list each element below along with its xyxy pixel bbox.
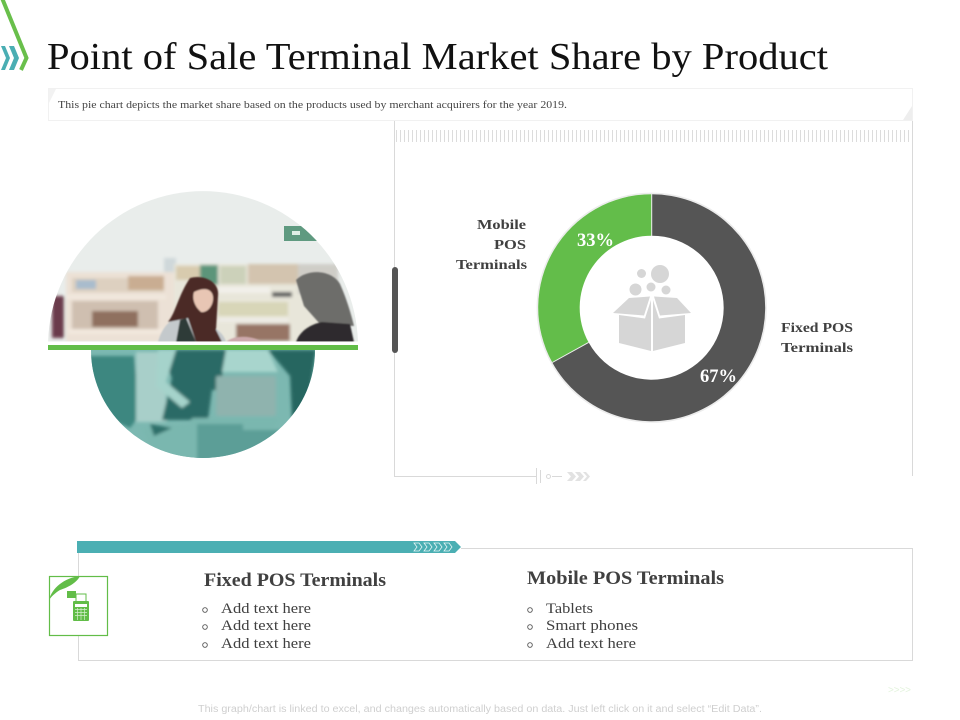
icon: POS calculator terminal	[49, 576, 108, 636]
label: Fixed POS Terminals: Fixed POS	[781, 321, 853, 336]
description box	[48, 88, 912, 120]
icon: open box with balls	[613, 265, 691, 351]
column: Mobile POS Terminals: Mobile POS Terminals	[527, 568, 724, 589]
column: Fixed POS Terminals	[203, 570, 386, 652]
column: Mobile POS Terminals: Smart phones	[546, 618, 638, 634]
decorative chevrons bottom right: >>>>	[888, 685, 911, 696]
photo: shop assistant at the checkout	[40, 185, 370, 462]
panel: terminal types	[49, 541, 912, 660]
teal banner with chevrons	[77, 541, 461, 553]
value label 67%: 67%	[700, 367, 737, 387]
column: Mobile POS Terminals: Add text here	[546, 636, 636, 652]
label: Mobile POS Terminals: Terminals	[456, 258, 528, 273]
title: Point of Sale Terminal Market Share by Product	[47, 36, 828, 78]
column: Fixed POS Terminals: Add text here	[221, 618, 311, 634]
value label 33%: 33%	[577, 231, 614, 251]
segment: Mobile POS 33%	[538, 194, 652, 362]
column: Fixed POS Terminals: Fixed POS Terminals	[204, 570, 386, 591]
footer note: This graph/chart is linked to excel, and changes automatically based on data. Just left click on it and select “Edit Data”.	[198, 704, 762, 715]
segment: Fixed POS 67%	[552, 194, 765, 421]
green photo divider	[48, 345, 358, 350]
photo lower half: teal tinted counter	[85, 350, 321, 462]
label: Mobile POS Terminals: Mobile	[477, 218, 526, 233]
divider handle	[392, 267, 398, 353]
column: Mobile POS Terminals	[527, 568, 724, 652]
header accent: green arrow and teal chevrons	[1, 0, 26, 70]
label: Mobile POS Terminals: POS	[494, 238, 526, 253]
column: Fixed POS Terminals: Add text here	[221, 601, 311, 617]
column: Fixed POS Terminals: Add text here	[221, 636, 311, 652]
photo upper half: shop shelves	[48, 191, 358, 342]
label: Fixed POS Terminals	[781, 321, 854, 356]
chart frame with ruler ticks	[394, 121, 912, 484]
label: Mobile POS Terminals	[456, 218, 528, 273]
description box: This pie chart depicts the market share based on the products used by merchant acquirers for the year 2019.	[58, 99, 567, 111]
label: Fixed POS Terminals: Terminals	[781, 341, 854, 356]
donut chart	[537, 193, 766, 422]
column: Mobile POS Terminals: Tablets	[546, 601, 593, 617]
